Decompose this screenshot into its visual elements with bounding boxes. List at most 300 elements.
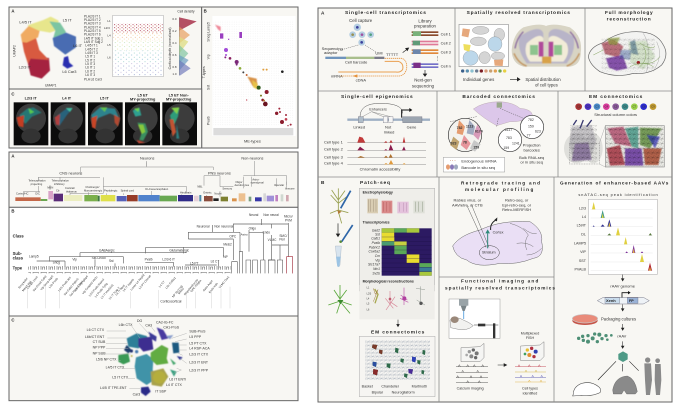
UMAP labels: NP PPP — [93, 346, 106, 350]
mouse brain with injection — [453, 204, 542, 265]
tree headings: NBL — [197, 184, 203, 188]
projection barcodes caption — [519, 142, 544, 165]
rotated type names: Sst Chodl Cdh9 — [32, 274, 48, 292]
in vivo imaging setup — [449, 299, 500, 338]
dendrogram labels: L2/3-6 IT — [162, 257, 175, 261]
brain 2 — [51, 102, 85, 145]
UMAP clusters — [118, 327, 183, 396]
tree headings: Telencephalon — [28, 179, 46, 183]
mouse brain with injection: Cortex — [493, 231, 504, 235]
sequencing adaptor and barcode — [322, 46, 407, 82]
ME axis ticks — [213, 128, 293, 135]
arrow — [498, 364, 507, 366]
panel: spatially resolved transcriptomics: Spatially resolved transcriptomics — [467, 10, 570, 16]
zoomed neurons circle: 6174 — [475, 129, 483, 133]
EM neuron reconstruction: Bipolar — [372, 391, 384, 395]
tree headings: Enteric — [203, 191, 212, 195]
T-type axis: Pvalb — [206, 116, 210, 125]
panel: morphology and EM — [328, 285, 435, 397]
UMAP labels: L6b/CT ENT — [85, 335, 105, 339]
tree headings: Oligo/ — [235, 180, 243, 184]
rotated type names: Corticocortical — [160, 300, 182, 304]
tree headings: D/C — [35, 191, 40, 195]
type list: L5 IT 1 — [85, 55, 95, 59]
dendrogram row labels: Class — [13, 234, 24, 239]
transcriptomics heatmap: Pvalb — [372, 241, 380, 245]
UMAP labels: UMAP1 — [45, 84, 57, 88]
mouse brain with injection: Striatum — [482, 251, 496, 255]
rAAV capsid — [618, 351, 628, 362]
cell density plot: 0.8 — [172, 65, 177, 69]
coronal brain section — [512, 25, 581, 67]
UMAP labels: CA3 — [145, 323, 152, 327]
type list: L6 IT 3 — [85, 73, 95, 77]
gene locus diagram: Not — [385, 124, 392, 129]
dendrogram labels: Lamp5 — [29, 255, 39, 259]
rotated type names: L6 IT Ntn5 — [114, 283, 126, 296]
tree headings: Spinal cord — [121, 188, 134, 192]
tree headings: Neurons — [140, 156, 155, 160]
caption: Spatial distribution — [525, 77, 561, 82]
transcriptomics heatmap: Vip — [375, 258, 380, 262]
sequencing adaptor and barcode: adaptor — [324, 50, 338, 55]
rotated type names: L1-2 Vip Igfbp6 — [74, 274, 89, 292]
panel: EM connectomics top: EM connectomics — [589, 94, 643, 100]
UMAP labels: L5 IT CTX — [112, 375, 129, 379]
type list: L6 IT 2 — [85, 69, 95, 73]
sequencing adaptor and barcode: TTTTT — [386, 52, 399, 57]
dendrogram row labels — [13, 234, 24, 270]
transcriptomics heatmap: Transcriptomics — [363, 221, 390, 225]
panel: single-cell transcriptomics — [321, 10, 452, 88]
tracing captions: AAVretro, or CTB — [452, 202, 483, 207]
tracing captions: Retro-MERFISH — [502, 207, 531, 212]
column colours: C2 — [586, 105, 590, 109]
dendrogram row labels: class — [13, 256, 24, 261]
dendrogram labels: Micro/ — [284, 215, 293, 219]
dendrogram row labels: Sub- — [13, 251, 23, 256]
panel: retrograde tracing: Retrograde tracing and — [461, 180, 540, 185]
panel: enhancer-based AAVs — [560, 181, 669, 396]
panel: A whole-animal taxonomy tree — [9, 152, 298, 207]
tree headings: ependymal — [251, 181, 264, 185]
panel: C neuron morphology brains: L5 ET — [137, 94, 149, 98]
type list — [84, 14, 103, 82]
dendrogram labels: Endo — [263, 230, 270, 234]
rotated type names: L2/3 Pvalb Rspo3 — [88, 277, 105, 297]
UMAP labels: IT SSP — [155, 389, 167, 393]
panel: functional imaging: spatially resolved transcriptomics — [445, 286, 555, 291]
panel: functional imaging: Functional imaging and — [461, 278, 538, 283]
patch-seq box — [359, 188, 435, 291]
EM neuron reconstruction: Basket — [362, 385, 373, 389]
type list: PLA2/3 IT 1 — [84, 14, 101, 18]
brain 4 — [125, 102, 160, 145]
UMAP labels: L5 PPP — [189, 335, 202, 339]
arrow down — [397, 320, 399, 327]
tree headings: MBN — [47, 185, 53, 189]
dendrogram labels: Meis2 — [223, 242, 232, 246]
dendrogram labels: OPC — [229, 234, 237, 238]
type list: L4/5 IT 1 — [85, 44, 98, 48]
UMAP labels: L6 IT ENTl — [169, 378, 186, 382]
type list: L4/5 IT 2 — [85, 47, 98, 51]
column colours: C3 — [595, 105, 599, 109]
transcriptomics heatmap: Cm — [375, 254, 380, 258]
column colours: C4 — [605, 105, 609, 109]
panel: full morphology reconstruction — [588, 10, 666, 75]
layer scatter plot: L1 — [107, 19, 111, 23]
column colours: C1 — [577, 105, 581, 109]
panel: full morphology reconstruction: reconstruction — [607, 17, 651, 23]
rAAV particles — [577, 332, 627, 344]
panel: multiplexed FISH: FISH — [526, 336, 535, 340]
tree headings: Telencephalon — [52, 179, 69, 183]
cell density plot: 0.4 — [172, 41, 177, 45]
transcriptomics heatmap: Ntc1 — [373, 267, 380, 271]
projection barcodes caption: Projection — [523, 142, 541, 147]
dendrogram labels: SMC/ — [279, 234, 287, 238]
rotated type names: L5 IT Hsd11b1 — [100, 283, 115, 300]
tree colored clusters — [15, 191, 289, 201]
AAV genome construct: FP — [629, 299, 634, 303]
mouse — [573, 383, 601, 396]
rotated type names: Sst Calb2 Pdlim5 — [63, 277, 80, 296]
panel: A cell type UMAP — [9, 7, 202, 89]
panel group: top left — [9, 7, 298, 148]
humans — [644, 357, 661, 395]
tree headings: Di-/mesencephalon — [145, 187, 169, 191]
ATAC tracks: VIP — [580, 250, 587, 254]
rotated type names: Meis2 Hgf — [21, 280, 32, 292]
ATAC tracks: PVALB — [574, 268, 587, 272]
T-type axis: ME-types — [244, 139, 261, 144]
UMAP labels: L6 Car3 — [62, 69, 77, 74]
neuron and tube illustration — [330, 188, 353, 267]
tree lines — [23, 161, 287, 197]
panel: single-cell epigenomics — [324, 94, 430, 171]
layer scatter plot: L6 — [107, 56, 111, 60]
dendrogram labels: VLMC — [268, 238, 277, 242]
barcode circles — [498, 115, 544, 152]
type leaves — [28, 252, 293, 273]
UMAP labels: DG — [137, 319, 143, 323]
panel: right column background — [318, 8, 672, 402]
tracing captions: Rabies virus, or — [453, 198, 482, 203]
panel: C neuron morphology brains — [9, 89, 202, 148]
dendrogram labels: L5 PT — [190, 261, 198, 265]
barcode circles: 782 — [528, 118, 534, 122]
layer scatter plot: L4 — [107, 34, 111, 38]
tree headings: Cb — [56, 189, 60, 193]
library preparation: Library — [418, 19, 432, 24]
cell density plot: 1.0 — [172, 72, 177, 76]
panel: C neuron morphology brains: L5 ET Non- — [169, 94, 189, 98]
dendrogram labels: Vip — [72, 257, 77, 261]
cell density plot: Cortical depth (normalized) — [168, 27, 172, 69]
UMAP labels: Car3 — [133, 392, 140, 396]
UMAP labels: L4 RSP-ACA — [189, 347, 210, 351]
gene locus diagram: Linked — [353, 124, 365, 129]
column zoom — [599, 126, 664, 167]
gene locus diagram: Gene — [407, 124, 417, 129]
rotated type names: Meis2 — [177, 286, 185, 295]
gene locus diagram: Enhancers — [369, 107, 387, 111]
transcriptomics heatmap — [363, 221, 432, 276]
ATAC tracks: L2/3 — [579, 206, 586, 210]
morphologies: L4 — [367, 299, 370, 301]
rotated type names: NP Slc17a8 — [171, 284, 184, 298]
UMAP labels: L6 IT — [73, 43, 83, 48]
zoomed neurons circle — [448, 118, 483, 152]
tree headings — [16, 156, 295, 195]
UMAP labels: CT SUB — [93, 340, 106, 344]
ATAC tracks: LAMP5 — [574, 241, 586, 245]
type list: L6 IT 1 — [85, 66, 95, 70]
chromatin tracks: Cell type 1 — [324, 140, 344, 145]
rotated type names: L4 CT — [158, 280, 166, 288]
zoomed neurons circle: 1113 — [466, 124, 473, 128]
chromatin tracks: Cell type 4 — [324, 161, 344, 166]
zoomed neurons circle: 782 — [457, 126, 463, 130]
panel: spatially resolved transcriptomics — [459, 10, 581, 88]
layer scatter plot: L2/3 — [104, 26, 110, 30]
chromatin tracks: Chromatin accessibility — [360, 166, 400, 171]
UMAP labels: L4 IT CTX — [166, 383, 182, 387]
panel: multiplexed FISH: identified — [523, 392, 537, 396]
column colours: Structural column colors — [594, 112, 637, 117]
dendrogram labels: Sst — [109, 259, 114, 263]
UMAP blob — [21, 17, 76, 79]
tracing captions: Retro-seq, or — [505, 198, 529, 203]
dendrogram labels: PVM — [285, 219, 292, 223]
UMAP labels: L2/3 IT PPP — [189, 368, 209, 372]
panel: single-cell transcriptomics: A — [321, 11, 325, 16]
panel: EM connectomics top — [564, 94, 664, 167]
rotated type names — [17, 273, 231, 308]
UMAP labels: L6b CTX — [119, 323, 133, 327]
zoomed neurons circle: 78 — [463, 140, 467, 144]
panel: C neuron morphology brains: MY-projecting — [166, 98, 192, 102]
rAAV particles: rAAV — [617, 334, 627, 339]
UMAP labels — [12, 17, 83, 88]
EM neuron reconstruction — [359, 336, 435, 397]
cell density plot: Cell density — [177, 10, 195, 14]
type list: PLA2/3 IT 3 — [84, 22, 101, 26]
library preparation: Cell n — [441, 64, 451, 69]
panel: retrograde tracing — [452, 180, 542, 265]
library preparation: Cell 2 — [441, 40, 452, 45]
AAV genome construct — [597, 291, 649, 311]
library preparation: sequencing — [412, 83, 435, 88]
tree headings: Peptidergic — [104, 188, 118, 192]
ATAC tracks: SST — [579, 259, 587, 263]
colored traces — [515, 365, 546, 382]
UMAP labels: L4/5 IT TPE-ENT — [100, 386, 127, 390]
panel: barcoded connectomics: Barcoded connectomics — [462, 94, 535, 100]
projection barcodes caption: barcodes — [523, 147, 540, 152]
tree headings: Astro- — [252, 178, 260, 182]
barcode circles: 159 — [528, 125, 534, 129]
panel: enhancer-based AAVs: Generation of enhancer-based AAVs — [560, 181, 669, 186]
layer scatter plot: L5 — [107, 43, 111, 47]
dendrogram labels: Astro — [241, 233, 248, 237]
panel: B ME-types heat — [202, 7, 298, 148]
transcriptomics heatmap: Sv2b — [372, 271, 380, 275]
chromatin tracks — [324, 137, 426, 171]
rotated type names: L4 Pvalb Tpbg — [94, 281, 109, 298]
EM neuron reconstruction: Neurogliaform — [392, 391, 415, 395]
type list: PLA2/3 IT 5 — [84, 29, 101, 33]
rotated type names: Lamp5 Lhx6 — [26, 275, 39, 290]
sequencing adaptor and barcode: Cell barcode — [345, 59, 368, 64]
UMAP labels: CA1-ProS — [163, 326, 180, 330]
T-type axis: Vip — [206, 54, 210, 59]
legend: Barcode in situ seq — [461, 165, 495, 170]
panel: multiplexed FISH: Multiplexed — [521, 331, 539, 335]
FISH volume — [521, 342, 544, 361]
rotated type names: Oligodendrocyte — [183, 278, 199, 296]
caption: of cell types — [535, 83, 558, 88]
panel: functional imaging — [445, 278, 555, 390]
ATAC tracks: L4 — [582, 215, 586, 219]
panel: multiplexed FISH — [515, 331, 546, 396]
barcode circles: 783 — [506, 136, 512, 140]
rotated type names: Lower L6 Nxph2 — [129, 273, 146, 291]
legend: Endogenous mRNA — [461, 158, 497, 163]
barcode circles: 1241 — [512, 141, 520, 145]
rotated type names: L5b Pvalb — [48, 276, 59, 289]
column colours: C7 — [633, 105, 637, 109]
gene locus diagram — [347, 103, 430, 134]
dendrogram row labels: Type — [13, 265, 23, 270]
panel: C neuron morphology brains: C — [11, 91, 14, 96]
type list: L5 IT 2 — [85, 58, 95, 62]
dendrogram labels: Pvalb — [145, 258, 153, 262]
rotated type names: Endo Xdh — [208, 282, 219, 294]
cell schematic — [459, 24, 508, 67]
ATAC tracks — [574, 199, 657, 274]
cell density plot: 0.0 — [172, 17, 177, 21]
EM neuron reconstruction: Chandelier — [381, 385, 400, 389]
panel: C whole-brain UMAP — [9, 316, 298, 401]
cell density plot — [168, 10, 197, 76]
panel: full morphology reconstruction: Full morphology — [605, 10, 653, 16]
type list: L4/5 IT Sdg 2 — [84, 40, 103, 44]
UMAP labels: UMAP2 — [12, 45, 16, 57]
column colours — [575, 103, 656, 117]
tracing captions — [452, 198, 532, 212]
rotated type names: L6 IT Inpp4b — [122, 277, 135, 292]
UMAP labels — [85, 319, 210, 396]
transcriptomics heatmap: Calb1 — [371, 237, 380, 241]
UMAP labels: L5/6 NP CTX — [96, 358, 117, 362]
rotated type names: L6b Col8a1 — [164, 276, 177, 290]
fly brain — [564, 120, 603, 164]
rotated type names: VLMC Osr1 — [218, 275, 231, 289]
UMAP labels: L2/3 IT — [19, 65, 32, 70]
sequencing adaptor and barcode: mRNA — [331, 74, 343, 79]
AAV genome construct: Xenh — [606, 298, 616, 303]
tree headings: CNS neurons — [59, 171, 82, 175]
barcode circles: 6117 — [505, 128, 512, 132]
tree headings: Hindbrain — [180, 190, 192, 194]
gene color dots — [461, 69, 506, 73]
rotated type names: Vip Sncg Aqp5 — [39, 274, 55, 291]
panel: C neuron morphology brains: L5 IT — [100, 97, 109, 101]
gene locus diagram: linked — [384, 129, 394, 134]
dendrogram labels: Glutamatergic — [169, 248, 189, 252]
T-type axis: Sncg Lamp5 — [206, 22, 210, 42]
panel: enhancer-based AAVs: snATAC-seq peak identification — [578, 192, 658, 197]
EM connectomics heading: EM connectomics — [371, 330, 425, 336]
panel: A whole-animal taxonomy tree: A — [11, 153, 15, 158]
panel: multiplexed FISH: Cell types — [522, 386, 538, 390]
reconstructed neuron, green — [328, 285, 352, 313]
ATAC tracks: L5I/IT — [577, 224, 587, 228]
UMAP labels: L2/3 IT CTX — [189, 352, 209, 356]
rotated type names: Vip Crispld2 Htr2c — [81, 275, 99, 295]
type list: PLA L6 Car3 — [84, 78, 102, 82]
tree headings: Cortex/HC — [16, 191, 28, 195]
tree headings: Cortical/ — [65, 186, 75, 190]
panel: patch-seq — [321, 180, 435, 291]
packaging cultures — [572, 314, 636, 330]
tree headings: Non-neurons — [241, 156, 264, 160]
panel: B ME-types heat: B — [204, 8, 207, 13]
type list: PLA2/3 IT 6 — [84, 33, 101, 37]
library preparation: Cell 1 — [441, 31, 452, 36]
EM neuron reconstruction: Martinotti — [412, 385, 427, 389]
panel: C whole-brain UMAP: C — [11, 318, 14, 323]
dendrogram labels: Non neuronal — [214, 225, 234, 229]
UMAP labels: L5 IT — [63, 17, 72, 22]
dendrogram labels: Sncg — [53, 261, 60, 265]
layer scatter plot — [104, 15, 163, 77]
dendrogram labels: Oligo — [249, 226, 256, 230]
panel: C neuron morphology brains: L2/3 IT — [25, 97, 37, 101]
column colours: C5 — [614, 105, 618, 109]
packaging cultures: Packaging cultures — [601, 316, 636, 321]
library preparation: preparation — [414, 24, 437, 29]
type list: PLA2/3 IT 2 — [84, 18, 101, 22]
cell density plot: 0.6 — [172, 53, 177, 57]
brain 3 — [88, 102, 123, 145]
T-type axis: Sst — [206, 85, 210, 90]
brain with neurons — [588, 32, 666, 75]
panel: barcoded connectomics — [443, 94, 544, 172]
legend — [443, 157, 505, 172]
column colours: C9 — [651, 105, 655, 109]
library preparation: Cell 3 — [441, 49, 452, 54]
rotated type names: L5 IT Tcap 2 — [108, 286, 121, 300]
panel: single-cell epigenomics: Single-cell epigenomics — [341, 94, 413, 100]
type colour strip — [28, 274, 295, 275]
caption — [463, 77, 561, 88]
UMAP labels: L5 PT CTX — [189, 341, 207, 345]
library preparation: Next-gen — [414, 78, 432, 83]
sequencing adaptor and barcode: Sequencing — [322, 46, 343, 51]
diagonal dots — [215, 25, 292, 126]
cell density plot: 0.2 — [172, 29, 177, 33]
panel: enhancer-based AAVs: rAAV genome — [610, 283, 636, 288]
type list: L5 IT 3 — [85, 62, 95, 66]
projection barcodes caption: Bulk RNA-seq — [519, 155, 544, 160]
tree headings: Monoaminergic — [84, 188, 103, 192]
dendrogram labels: Non neural — [263, 213, 279, 217]
barcode circles: 77 — [527, 134, 531, 138]
tree headings: Immune — [285, 186, 295, 190]
